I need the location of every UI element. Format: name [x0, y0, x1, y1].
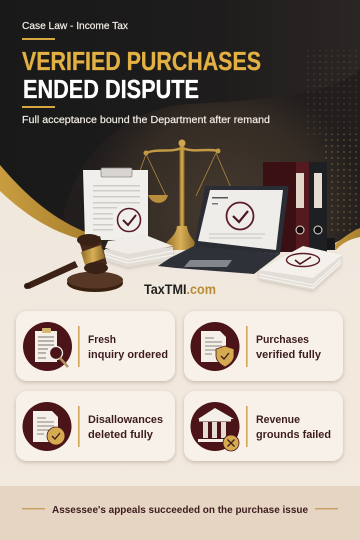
lower gold rule [22, 106, 55, 108]
label: inquiry ordered [88, 349, 168, 361]
icon: document with check badge [22, 402, 72, 451]
icon: clipboard with magnifier [23, 322, 72, 371]
eyebrow label: Case Law - Income Tax [22, 21, 128, 32]
gold swoosh right [328, 228, 360, 250]
illustration: laptop [158, 186, 289, 274]
gold swoosh left [0, 165, 88, 240]
label: Fresh [88, 334, 116, 346]
background: dark header with curved lower edge [0, 0, 360, 250]
label: Disallowances [88, 414, 163, 426]
card: revenue grounds failed [184, 391, 343, 461]
label: Revenue [256, 414, 300, 426]
card: purchases verified fully [184, 311, 343, 381]
background: warm glow [98, 70, 360, 250]
icon: document with shield [190, 322, 240, 371]
label: deleted fully [88, 429, 154, 441]
icon: court building with cross badge [190, 402, 240, 451]
label: grounds failed [256, 429, 331, 441]
divider [246, 406, 248, 447]
divider [78, 326, 80, 367]
footer band [0, 486, 360, 540]
divider [78, 406, 80, 447]
illustration: clipboard report [83, 168, 148, 240]
label [256, 414, 331, 441]
background: faint upper dot texture [306, 50, 360, 135]
divider [246, 326, 248, 367]
label: verified fully [256, 349, 322, 361]
illustration: binders [263, 162, 335, 252]
label [256, 334, 322, 361]
brand: TaxTMI.com: TaxTMI.com [144, 282, 216, 297]
label [88, 414, 163, 441]
illustration: balance scales [131, 140, 232, 250]
title [22, 48, 261, 104]
card: fresh inquiry ordered [16, 311, 175, 381]
subtitle: Full acceptance bound the Department after remand [22, 114, 270, 126]
title: ENDED DISPUTE [23, 76, 199, 104]
card: disallowances deleted fully [16, 391, 175, 461]
illustration: right document stack [259, 246, 342, 290]
title: VERIFIED PURCHASES [22, 48, 261, 76]
illustration: gavel [24, 234, 123, 292]
top gold rule [22, 38, 55, 40]
label [88, 334, 168, 361]
footer text: Assessee's appeals succeeded on the purchase issue [52, 504, 308, 516]
illustration: paper stack [105, 236, 173, 267]
label: Purchases [256, 334, 309, 346]
background: gold dot texture [322, 134, 360, 234]
